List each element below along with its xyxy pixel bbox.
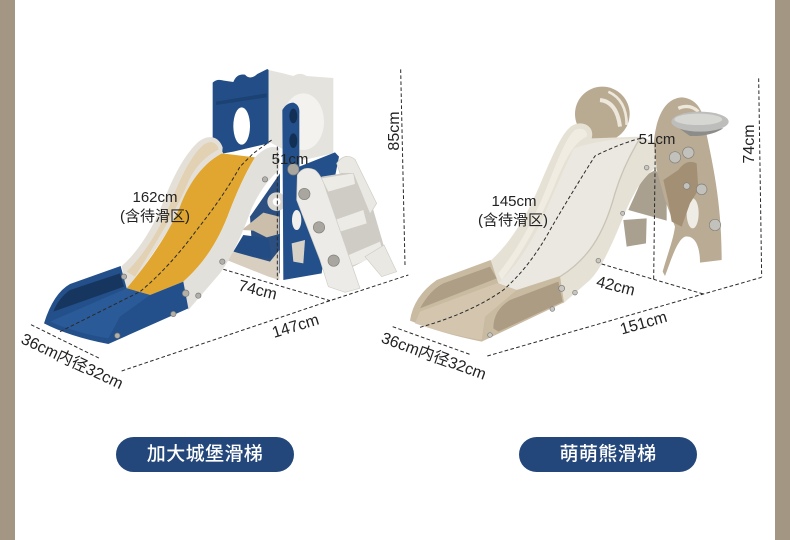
ladder bolts xyxy=(288,164,339,266)
label: castle height 85cm: 85cm xyxy=(386,111,403,151)
label: bear depth 42cm: 42cm xyxy=(595,274,637,300)
slide right rail xyxy=(183,147,279,310)
label: castle length 147cm: 147cm xyxy=(270,312,321,342)
label: castle waiting area: (含待滑区) xyxy=(120,208,190,225)
castle slide illustration xyxy=(31,69,408,371)
slide length dashed line xyxy=(60,140,272,332)
dimension dashed lines xyxy=(31,69,408,371)
ladder front rail xyxy=(297,168,360,292)
label: castle width 51cm: 51cm xyxy=(272,151,308,168)
right side border xyxy=(775,0,790,540)
label: bear entry width: 36cm内径32cm xyxy=(379,329,489,384)
bear bolts xyxy=(669,147,721,231)
basket xyxy=(671,112,729,136)
slide taupe end xyxy=(410,260,564,342)
label: castle depth 74cm: 74cm xyxy=(237,278,279,304)
rear beige strut xyxy=(242,213,279,237)
ladder steps xyxy=(307,172,385,267)
label: castle entry width: 36cm内径32cm xyxy=(18,330,126,393)
tower blue panel xyxy=(213,69,269,153)
bear left ear xyxy=(575,87,630,141)
slide blue end xyxy=(44,266,188,344)
rear backing xyxy=(250,173,280,273)
left side border xyxy=(0,0,15,540)
rear panel and leg xyxy=(623,170,667,247)
bear slide illustration xyxy=(393,78,762,356)
slide bed xyxy=(497,138,640,290)
tower white panel xyxy=(269,70,333,160)
product pill: castle slide xyxy=(116,437,294,472)
column holes xyxy=(289,109,305,263)
product pill: castle slide: 加大城堡滑梯 xyxy=(147,444,263,465)
blue column xyxy=(282,103,339,280)
slide bolts xyxy=(488,165,649,337)
slide right rail edge xyxy=(560,138,640,277)
slide left inner wall xyxy=(127,142,219,277)
slide left rim xyxy=(122,137,223,290)
label: bear slide length: 145cm xyxy=(491,193,537,210)
label: castle slide length: 162cm xyxy=(132,189,178,206)
product pill: bear slide xyxy=(519,437,697,472)
label: bear height 74cm: 74cm xyxy=(741,124,758,164)
step treads xyxy=(322,173,383,267)
slide left inner wall xyxy=(498,129,587,280)
rear base xyxy=(227,250,279,280)
rear blue supports xyxy=(233,235,272,258)
dimension dashed lines xyxy=(393,78,762,356)
label: bear waiting area: (含待滑区) xyxy=(478,212,548,229)
bear face xyxy=(663,162,698,227)
label: bear length 151cm: 151cm xyxy=(618,309,669,338)
slide silhouette xyxy=(491,123,657,303)
tower window xyxy=(283,93,324,150)
white circle opening xyxy=(267,192,286,211)
ladder rear rail xyxy=(337,156,397,277)
tower depth dashed line xyxy=(276,147,279,280)
slide yellow bed xyxy=(127,153,255,295)
slide bolts xyxy=(115,177,268,338)
label: bear width 51cm: 51cm xyxy=(639,131,675,148)
product pill: bear slide: 萌萌熊滑梯 xyxy=(559,444,656,465)
slide length dashed line xyxy=(420,138,640,327)
bear right body xyxy=(653,97,722,276)
